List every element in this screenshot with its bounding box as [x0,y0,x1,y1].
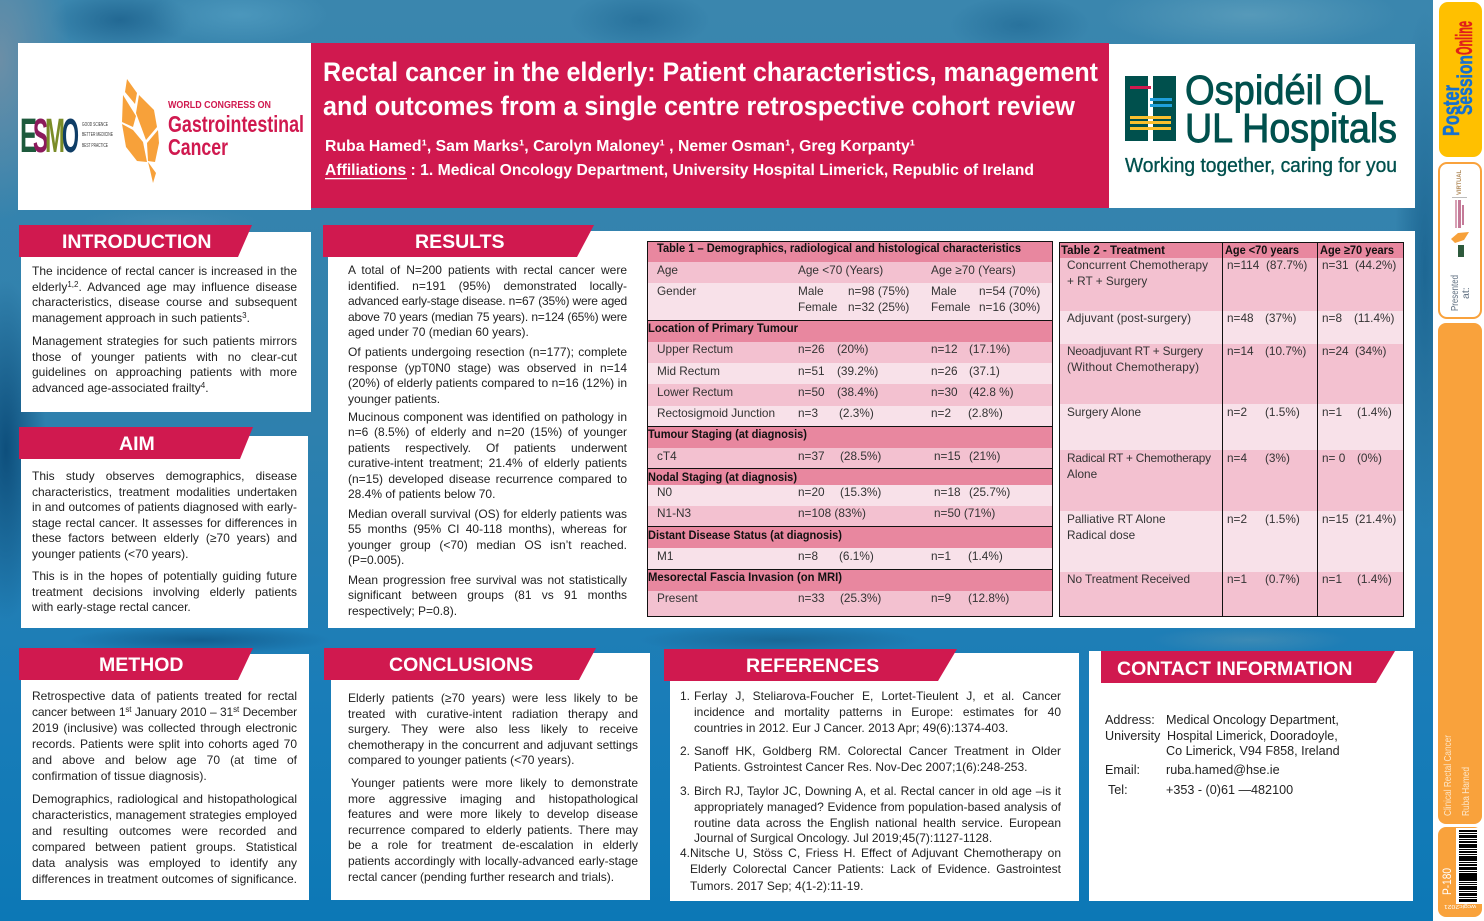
table 1: demographics, radiological and histological characteristics: n=108 (83%) [798,506,866,520]
text: contact details: University [1105,729,1160,743]
table 1: demographics, radiological and histological characteristics: n=33 [798,591,825,605]
text: references: 1. [680,689,690,703]
heading: contact information: CONTACT INFORMATION [1117,658,1352,680]
table 1: demographics, radiological and histological characteristics: Distant Disease Status (at diagnosis) [648,528,842,542]
table 2: treatment: (11.4%) [1354,311,1395,325]
table 1: demographics, radiological and histological characteristics: n=98 (75%) [848,284,909,298]
sidebar [1433,0,1484,921]
heading: contact information [1101,651,1395,683]
logo: ESMO and World Congress on Gastrointestinal Cancer [20,79,304,183]
table 2: treatment: n=8 [1322,311,1342,325]
table 2: treatment: (3%) [1265,451,1290,465]
table 1: demographics, radiological and histological characteristics: (42.8 %) [969,385,1014,399]
table 1: demographics, radiological and histological characteristics: Male [931,284,957,298]
panel: aim [21,436,308,628]
table 1: demographics, radiological and histological characteristics: n=15 [934,449,961,463]
table 1: demographics, radiological and histological characteristics: Tumour Staging (at diagnosis) [648,427,807,441]
text: conclusions: treated with curative-intent radiation therapy and [348,707,638,721]
text: introduction [32,264,297,394]
text: conclusions: Younger patients were more likely to demonstrate [351,776,638,790]
table 2: treatment: (1.5%) [1265,405,1300,419]
text: results: (P=0.005). [348,553,404,567]
text: conclusions: compared to younger patients (<70 years). [348,753,574,767]
text: method: 2019 (inclusive) was collected through electronic [32,721,297,735]
text: results: Mean progression free survival was not statistically [348,572,627,586]
text: method: cancer between 1st January 2010 – 31st December [32,705,297,719]
table 1: demographics, radiological and histological characteristics: n=8 [798,549,818,563]
text: results: response (ypT0N0 stage) was observed in n=14 [348,360,627,374]
heading: references: REFERENCES [746,655,879,677]
table 2: treatment: (0.7%) [1265,572,1300,586]
text: method: records. Patients were split into cohorts aged 70 [32,737,297,751]
text: references: incidence and mortality patterns in Europe: estimates for 40 [694,705,1061,719]
text: aim: stage rectal cancer. It assesses for differences in [32,516,297,530]
poster session online badge: Poster [1438,85,1464,136]
poster number and barcode: wcgic2021 [1444,903,1477,909]
table 1: demographics, radiological and histological characteristics: Upper Rectum [657,342,733,356]
text: method [32,689,297,886]
text: aim: characteristics, treatment modalities undertaken [32,485,297,499]
table 1: demographics, radiological and histological characteristics: Gender [657,284,696,298]
table 2: treatment: Palliative RT Alone [1067,512,1166,526]
text: contact details: Hospital Limerick, Dooradoyle, [1167,729,1338,743]
table 1: demographics, radiological and histological characteristics: n=32 (25%) [848,300,909,314]
text: conclusions: chemotherapy in the concurrent and adjuvant settings [348,738,638,752]
table 2: treatment: (0%) [1357,451,1382,465]
table 2: treatment: Alone [1067,467,1098,481]
table 1: demographics, radiological and histological characteristics: Rectosigmoid Junction [657,406,775,420]
table 2: treatment: Neoadjuvant RT + Surgery [1067,344,1203,358]
text: results: Mucinous component was identified on pathology in [348,410,627,424]
text: contact details: Address: [1105,713,1155,727]
table 2: treatment: n=1 [1322,405,1342,419]
text: conclusions: recurrence compared to elderly patients. There may [348,823,638,837]
table 1: demographics, radiological and histological characteristics: n=26 [931,364,958,378]
table 1: demographics, radiological and histological characteristics: n=30 [931,385,958,399]
table 2: treatment: n=24 [1322,344,1349,358]
table 1: demographics, radiological and histological characteristics: Nodal Staging (at diagnosis) [648,470,797,484]
table 2: treatment: (37%) [1265,311,1297,325]
text: conclusions: rectal cancer (pending further research and trials). [348,870,614,884]
table 1: demographics, radiological and histological characteristics: (6.1%) [839,549,874,563]
logo: ESMO and World Congress on Gastrointestinal Cancer: Cancer [168,134,228,160]
text: results: younger patients. [348,392,440,406]
text: results: significant between groups (81 vs 91 months [348,588,627,602]
table 2: treatment: (10.7%) [1265,344,1306,358]
table 1: demographics, radiological and histological characteristics: n=26 [798,342,825,356]
panel: results [328,231,1415,628]
table 1: demographics, radiological and histological characteristics: n=37 [798,449,825,463]
heading: method [19,648,253,680]
heading: method: METHOD [99,654,184,676]
text: results: (n=15) developed disease recurrence compared to [348,472,627,486]
table 2: treatment: n=2 [1227,405,1247,419]
heading: references [664,649,957,681]
logo: ESMO and World Congress on Gastrointestinal Cancer: O [62,110,79,163]
text: references: Patients. Gstrointest Cancer Res. Nov-Dec 2007;1(6):248-253. [694,760,1028,774]
text: conclusions: be a role for treatment de-escalation in elderly [348,838,638,852]
table 1: demographics, radiological and histological characteristics: (2.3%) [839,406,874,420]
heading: conclusions: CONCLUSIONS [389,654,533,676]
text: introduction: those of younger patients with no clear-cut [32,350,297,364]
table 1: demographics, radiological and histological characteristics: (15.3%) [840,485,881,499]
table 1: demographics, radiological and histological characteristics: Female [931,300,971,314]
text: results: younger group (<70) median OS isn’t reached. [348,538,627,552]
table 2: treatment: Radical dose [1067,528,1136,542]
text: method: and resulting outcomes were recorded and [32,824,297,838]
text: references: countries in 2012. Eur J Cancer. 2013 Apr; 49(6):1374-403. [694,721,1008,735]
table 1: demographics, radiological and histological characteristics: N0 [657,485,673,499]
table 1: demographics, radiological and histological characteristics: n=3 [798,406,818,420]
title banner [311,43,1109,208]
text: references [680,689,1061,893]
title: and outcomes from a single centre retrospective cohort review [323,91,1076,121]
table 1: demographics, radiological and histological characteristics: Age <70 (Years) [798,263,883,277]
text: results: Median overall survival (OS) for elderly patients was [348,506,627,520]
heading: introduction [19,225,252,257]
text: results: advanced early-stage disease. n=67 (35%) were aged [348,294,627,308]
table 2: treatment: Radical RT + Chemotherapy [1067,451,1211,465]
text: results: A total of N=200 patients with rectal cancer were [348,263,627,277]
text: references: appropriately managed? Evidence from population-based analysis of [694,800,1061,814]
text: contact details: +353 - (0)61 —482100 [1166,783,1293,797]
table 1: demographics, radiological and histological characteristics: (25.3%) [840,591,881,605]
logo: ESMO and World Congress on Gastrointestinal Cancer: M [45,110,65,163]
table 1: demographics, radiological and histological characteristics: n=2 [931,406,951,420]
text: aim: This is in the hopes of potentially guiding future [32,569,297,583]
text: aim: in and outcomes of patients diagnosed with early- [32,500,297,514]
table 2: treatment: Adjuvant (post-surgery) [1067,311,1191,325]
table 2: treatment: No Treatment Received [1067,572,1190,586]
text: introduction: management approach in such patients3. [32,310,250,324]
text: references: 3. [680,784,690,798]
logo: ESMO and World Congress on Gastrointestinal Cancer: GOOD SCIENCE [82,122,108,128]
table 2: treatment: + RT + Surgery [1067,274,1147,288]
panel: UL Hospitals logo [1109,44,1415,208]
text: method: characteristics, management strategies employed [32,808,297,822]
presented at box [1439,163,1481,318]
table 1: demographics, radiological and histological characteristics: (1.4%) [968,549,1003,563]
table 2: treatment: (1.4%) [1357,572,1392,586]
table 1: demographics, radiological and histological characteristics: n=12 [931,342,958,356]
table 2: treatment: (87.7%) [1266,258,1307,272]
text: introduction: characteristics, disease course and subsequent [32,295,297,309]
text: introduction: elderly1,2. Advanced age may influence disease [32,280,297,294]
text: results: 55 months (95% CI 40-118 months), whereas for [348,522,627,536]
table 2: treatment: n=48 [1227,311,1254,325]
text: results: aged under 70 (median 60 years). [348,325,529,339]
text: method: confirmation of tissue diagnosis). [32,769,207,783]
panel: method [21,654,309,900]
text: introduction: advanced age-associated frailty4. [32,380,209,394]
text: references: routine data across the English national health service. European [694,816,1061,830]
table 1: demographics, radiological and histological characteristics: n=9 [931,591,951,605]
text: contact details: Co Limerick, V94 F858, Ireland [1166,744,1340,758]
table 2: treatment: n=1 [1227,572,1247,586]
table 2: treatment: n=1 [1322,572,1342,586]
table 1: demographics, radiological and histological characteristics: n=51 [798,364,825,378]
table 1: demographics, radiological and histological characteristics: (17.1%) [969,342,1010,356]
text: aim [32,469,297,614]
table 2: treatment: n=14 [1227,344,1254,358]
authors and affiliations: Affiliations : 1. Medical Oncology Department, University Hospital Limerick, Republic of Ireland [325,162,1034,179]
poster number and barcode [1438,827,1484,917]
table 1: demographics, radiological and histological characteristics: n=16 (30%) [979,300,1040,314]
table 2: treatment: n=2 [1227,512,1247,526]
text: results: respectively; P=0.8). [348,604,457,618]
text: conclusions: Elderly patients (≥70 years) were less likely to be [348,691,638,705]
text: results: identified. n=191 (95%) demonstrated locally- [348,278,627,292]
table 1: demographics, radiological and histological characteristics: Age [657,263,678,277]
table 1: demographics, radiological and histological characteristics: n=50 (71%) [934,506,995,520]
table 2: treatment: n= 0 [1322,451,1346,465]
table 1: demographics, radiological and histological characteristics [647,241,1053,617]
text: references: Ferlay J, Steliarova-Foucher E, Lortet-Tieulent J, et al. Cancer [694,689,1061,703]
text: method: Retrospective data of patients treated for rectal [32,689,297,703]
text: contact details: Medical Oncology Department, [1166,713,1339,727]
logo: ESMO and World Congress on Gastrointestinal Cancer: S [33,110,48,163]
table 1: demographics, radiological and histological characteristics: (38.4%) [837,385,878,399]
table 1: demographics, radiological and histological characteristics: (39.2%) [837,364,878,378]
heading: aim [19,427,253,459]
logo: ESMO and World Congress on Gastrointestinal Cancer: BETTER MEDICINE [82,132,113,138]
table 2: treatment: Table 2 - Treatment [1061,243,1165,257]
table 2: treatment: n=4 [1227,451,1247,465]
text: aim: these factors between elderly (≥70 years) and [32,531,297,545]
table 2: treatment: (1.5%) [1265,512,1300,526]
logo: UL Hospitals: Ospidéil OL [1185,67,1384,113]
table 2: treatment: Age <70 years [1225,243,1299,257]
text: results: patients respectively. Of patients underwent [348,440,627,454]
text: method: differences in treatment outcomes of significance. [32,872,297,886]
text: introduction: Management strategies for such patients mirrors [32,334,297,348]
logo: ESMO and World Congress on Gastrointestinal Cancer: E [20,110,37,163]
logo: UL Hospitals [1124,67,1397,177]
table 1: demographics, radiological and histological characteristics: Mesorectal Fascia Invasion (on MRI) [648,570,842,584]
table 1: demographics, radiological and histological characteristics: M1 [657,549,673,563]
table 2: treatment: (34%) [1355,344,1387,358]
table 1: demographics, radiological and histological characteristics: (28.5%) [840,449,881,463]
text: conclusions: patients accordingly with locally-advanced early-stage [348,854,638,868]
table 2: treatment: Concurrent Chemotherapy [1067,258,1208,272]
text: results: 28.4% of patients below 70. [348,487,495,501]
category and author tab: Clinical Rectal Cancer [1442,735,1454,816]
text: results [348,263,627,618]
text: conclusions [348,691,638,884]
text: references: 2. [680,744,690,758]
text: contact details: Tel: [1108,783,1128,797]
table 2: treatment: n=114 [1227,258,1260,272]
text: references: Elderly Colorectal Cancer Patients: Lack of Evidence. Gastrointest [690,862,1061,876]
text: contact details [1105,713,1340,797]
text: results: (20%) of elderly patients compared to n=16 (12%) in [348,376,627,390]
table 1: demographics, radiological and histological characteristics: (25.7%) [969,485,1010,499]
panel: contact information [1089,651,1413,901]
heading: results: RESULTS [415,231,505,253]
table 2: treatment: Surgery Alone [1067,405,1142,419]
table 1: demographics, radiological and histological characteristics: n=50 [798,385,825,399]
text: method: data analysis was employed to identify any [32,856,297,870]
title [323,57,1098,121]
table 2: treatment: (1.4%) [1357,405,1392,419]
text: references: 4.Nitsche U, Stöss C, Friess H. Effect of Adjuvant Chemotherapy on [680,846,1061,860]
category and author tab [1438,323,1482,824]
table 1: demographics, radiological and histological characteristics: (20%) [837,342,869,356]
text: method: compared between patient groups. Statistical [32,840,297,854]
table 2: treatment: Age ≥70 years [1320,243,1394,257]
table 1: demographics, radiological and histological characteristics: (12.8%) [968,591,1009,605]
text: contact details: ruba.hamed@hse.ie [1166,763,1280,777]
table 1: demographics, radiological and histological characteristics: n=1 [931,549,951,563]
table 1: demographics, radiological and histological characteristics: cT4 [657,449,677,463]
text: results: n=6 (8.5%) of elderly and n=20 (15%) of younger [348,425,627,439]
table 1: demographics, radiological and histological characteristics: N1-N3 [657,506,692,520]
authors and affiliations: Ruba Hamed¹, Sam Marks¹, Carolyn Maloney¹ , Nemer Osman¹, Greg Korpanty¹ [325,138,915,155]
table 1: demographics, radiological and histological characteristics: (2.8%) [968,406,1003,420]
category and author tab: Ruba Hamed [1460,767,1472,816]
table 1: demographics, radiological and histological characteristics: Location of Primary Tumour [648,321,798,335]
text: results: Of patients undergoing resection (n=177); complete [348,345,627,359]
table 1: demographics, radiological and histological characteristics: Male [798,284,824,298]
table 2: treatment: (Without Chemotherapy) [1067,360,1199,374]
heading: results [323,225,594,257]
table 1: demographics, radiological and histological characteristics: Age ≥70 (Years) [931,263,1016,277]
panel: conclusions [331,653,650,900]
authors and affiliations [325,138,1034,179]
text: aim: treatment decisions involving elderly patients [32,585,297,599]
text: references: Tumors. 2017 Sep; 4(1-2):11-19. [690,879,863,893]
text: references: Birch RJ, Taylor JC, Downing A, et al. Rectal cancer in old age –is it [694,784,1061,798]
logo: ESMO and World Congress on Gastrointestinal Cancer: BEST PRACTICE [82,143,108,149]
poster session online badge: Session [1454,55,1477,115]
text: results: curative-intent treatment; 21.4% of elderly patients [348,456,627,470]
text: aim: with early-stage rectal cancer. [32,600,191,614]
table 1: demographics, radiological and histological characteristics: Table 1 – Demographics, radiological and histological characteristics [657,241,1021,255]
table 2: treatment: n=31 [1322,258,1349,272]
table 1: demographics, radiological and histological characteristics: n=54 (70%) [979,284,1040,298]
table 1: demographics, radiological and histological characteristics: n=20 [798,485,825,499]
presented at box: VIRTUAL [1456,170,1463,195]
table 1: demographics, radiological and histological characteristics: (37.1) [969,364,1000,378]
poster session online badge [1438,2,1482,157]
presented at box: at: [1460,287,1472,299]
table 1: demographics, radiological and histological characteristics: n=18 [934,485,961,499]
presented at box: Presented [1449,275,1461,311]
text: method: and above and below age 70 (at time of [32,753,297,767]
poster number and barcode: P-180 [1440,868,1454,895]
panel: references [670,653,1079,901]
text: conclusions: more aggressive imaging and histopathological [348,792,638,806]
table 2: treatment: (44.2%) [1355,258,1396,272]
table 1: demographics, radiological and histological characteristics: (21%) [969,449,1001,463]
text: conclusions: features and were more likely to develop disease [348,807,638,821]
table 1: demographics, radiological and histological characteristics: Female [798,300,838,314]
panel: introduction [21,232,311,412]
heading: aim: AIM [119,433,155,455]
text: references: Sanoff HK, Goldberg RM. Colorectal Cancer Treatment in Older [694,744,1061,758]
text: conclusions: surgery. They were also less likely to receive [348,722,638,736]
text: references: Journal of Surgical Oncology. Jul 2019;45(7):1127-1128. [694,831,992,845]
text: aim: This study observes demographics, disease [32,469,297,483]
text: results: above 70 years (median 75 years). n=124 (65%) were [348,310,627,324]
text: contact details: Email: [1105,763,1140,777]
heading: introduction: INTRODUCTION [62,231,212,253]
table 2: treatment [1059,242,1404,617]
logo: UL Hospitals: UL Hospitals [1185,105,1397,151]
text: introduction: The incidence of rectal cancer is increased in the [32,264,297,278]
panel: congress logo [18,43,311,210]
table 2: treatment: n=15 [1322,512,1349,526]
heading: conclusions [324,648,596,680]
text: method: Demographics, radiological and histopathological [32,792,297,806]
logo: UL Hospitals: Working together, caring for you [1125,155,1397,177]
logo: ESMO and World Congress on Gastrointestinal Cancer: WORLD CONGRESS ON [168,99,271,111]
text: aim: younger patients (<70 years). [32,547,188,561]
table 1: demographics, radiological and histological characteristics: Lower Rectum [657,385,733,399]
table 1: demographics, radiological and histological characteristics: Present [657,591,698,605]
text: introduction: guidelines on approaching patients with more [32,365,297,379]
table 1: demographics, radiological and histological characteristics: Mid Rectum [657,364,720,378]
table 2: treatment: (21.4%) [1355,512,1396,526]
